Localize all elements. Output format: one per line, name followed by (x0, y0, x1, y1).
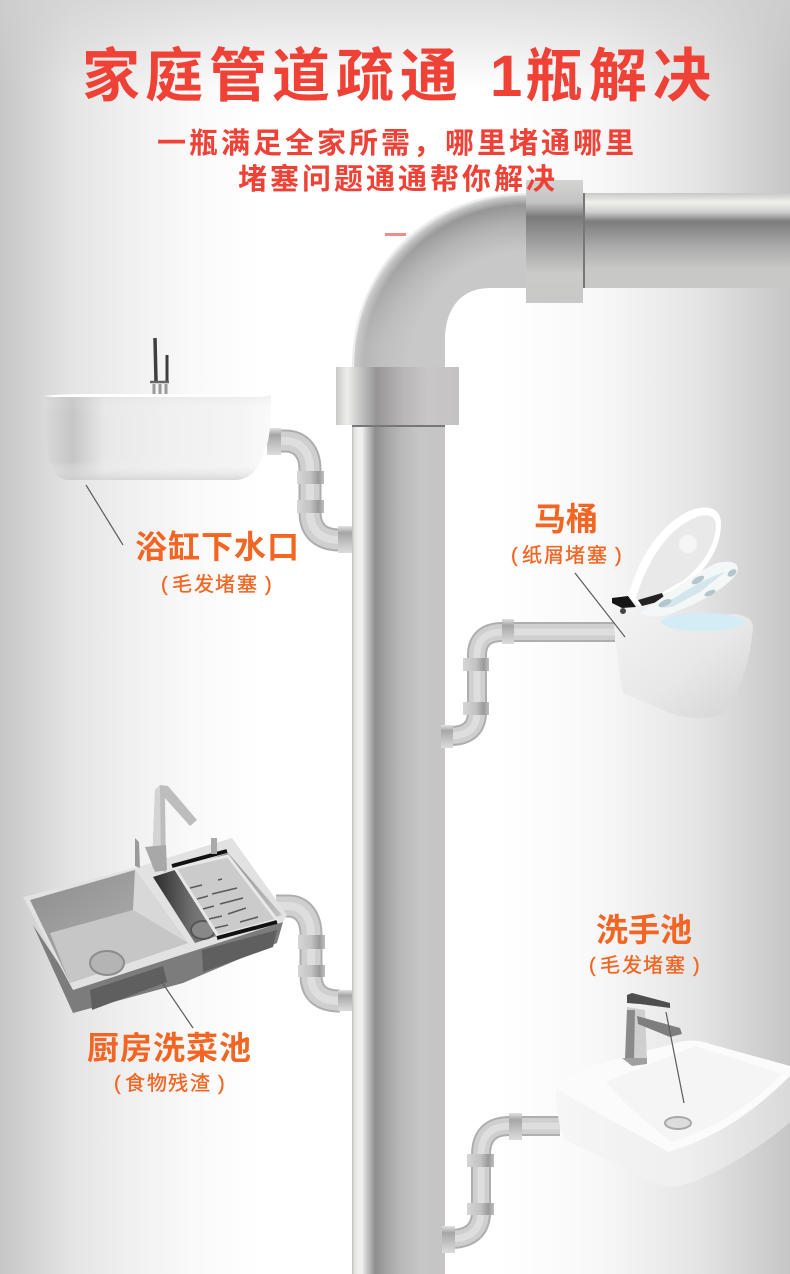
wash basin (556, 993, 790, 1187)
pipe collar: vertical (336, 367, 459, 425)
subtitle: 堵塞问题通通帮你解决 (238, 163, 555, 196)
drain basket (175, 856, 277, 936)
right bowl (153, 853, 282, 943)
label: bathtub: 浴缸下水口 (135, 529, 299, 565)
subtitle (157, 127, 634, 196)
bathtub (43, 338, 271, 480)
label: wash basin: 洗手池 (596, 912, 692, 948)
label: wash basin: (毛发堵塞) (589, 954, 700, 977)
pipe collar: horizontal (526, 180, 583, 303)
faucet (625, 1007, 647, 1060)
basin top surface (556, 1041, 790, 1152)
branch pipe: wash basin (442, 1113, 560, 1253)
left bowl (30, 870, 188, 983)
kitchen sink (23, 785, 287, 1013)
label: toilet: (纸屑堵塞) (511, 544, 622, 567)
water bowl (661, 613, 745, 631)
label: toilet: 马桶 (534, 501, 598, 537)
label: kitchen sink (87, 1030, 251, 1095)
main drain pipe (352, 425, 445, 1274)
body (612, 603, 753, 718)
label: bathtub: (毛发堵塞) (161, 573, 272, 596)
left drain (90, 951, 124, 975)
body (33, 922, 283, 1013)
title: 家庭管道疏通1瓶解决 (82, 44, 711, 109)
label: bathtub (135, 529, 299, 596)
label: toilet (511, 501, 622, 567)
toilet (612, 507, 753, 718)
top plate (23, 838, 287, 990)
right drain (191, 921, 215, 939)
drain (665, 1117, 691, 1129)
label: kitchen sink: (食物残渣) (114, 1072, 225, 1095)
label: wash basin (589, 912, 700, 977)
seat (640, 562, 738, 616)
lid (628, 507, 721, 606)
faucet (152, 785, 197, 872)
callout lines (86, 485, 684, 1103)
elbow pipe (352, 193, 526, 368)
basin body (556, 1041, 790, 1187)
small pink mark (385, 233, 406, 236)
label: kitchen sink: 厨房洗菜池 (87, 1030, 251, 1066)
basin bowl (606, 1046, 782, 1142)
branch pipe: bathtub (267, 428, 352, 553)
tub body (43, 395, 271, 480)
subtitle: 一瓶满足全家所需，哪里堵通哪里 (157, 127, 634, 160)
branch pipe: kitchen sink (276, 906, 352, 1011)
branch pipe: toilet (441, 619, 615, 748)
faucet (150, 338, 169, 394)
horizontal pipe (583, 193, 790, 288)
hinge parts (612, 596, 636, 608)
